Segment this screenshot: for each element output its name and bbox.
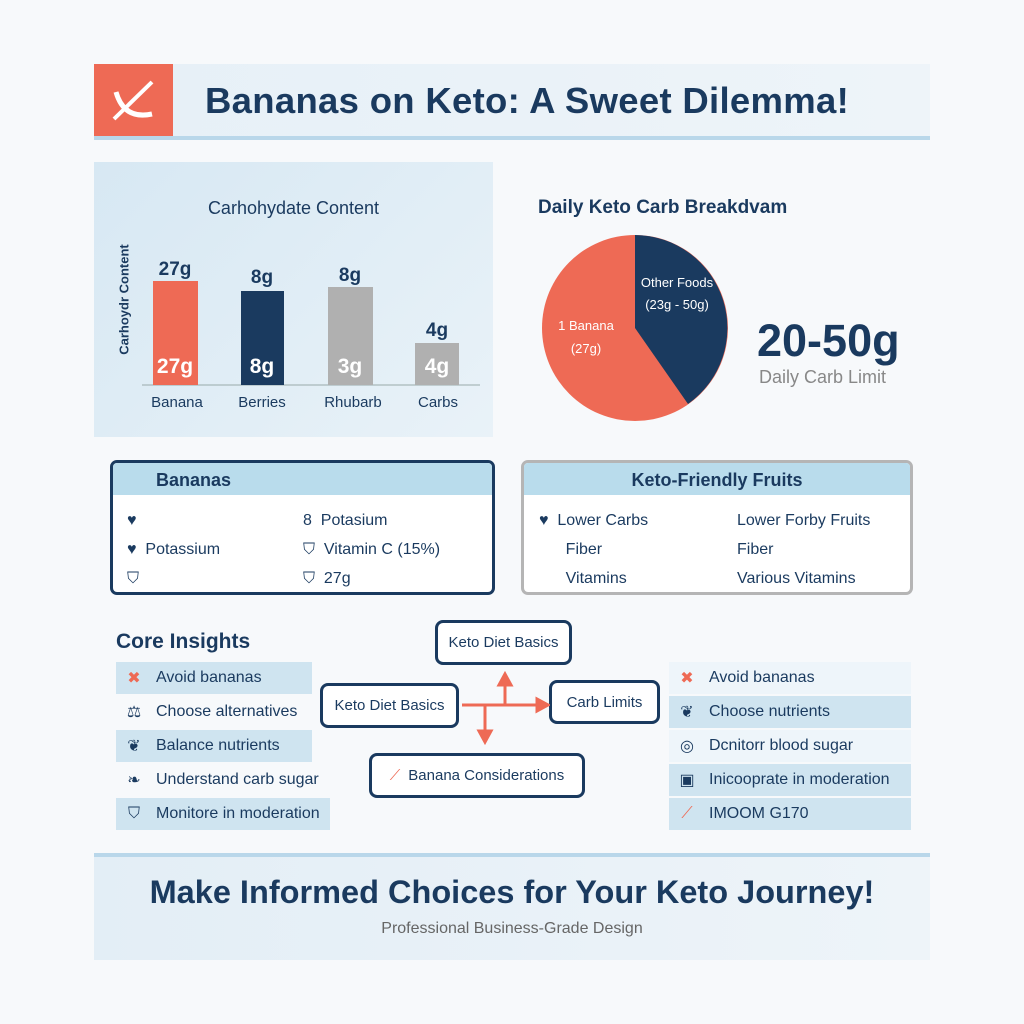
pie chart: Other Foods [641, 275, 714, 290]
right insight list: IMOOM G170 [709, 805, 809, 822]
left insight list: ❧ [127, 772, 141, 789]
right insight list: ✖ [680, 670, 694, 687]
left insight list: ✖ [127, 670, 141, 687]
bar chart: 8g [250, 355, 274, 378]
pie chart [542, 235, 728, 421]
panel: keto fruits: Various Vitamins [737, 570, 856, 587]
footer: Make Informed Choices for Your Keto Journey! [150, 874, 874, 910]
left insight list: Choose alternatives [156, 703, 297, 720]
panel: keto fruits: Lower Forby Fruits [737, 512, 870, 529]
arrows [462, 671, 550, 745]
panel: keto fruits: Fiber [566, 541, 602, 558]
icon: crossed banana [94, 64, 173, 136]
panel: keto fruits: Fiber [737, 541, 773, 558]
footer: Professional Business-Grade Design [381, 920, 643, 937]
right insight list: Choose nutrients [709, 703, 830, 720]
panel: bananas: ♥ Potassium [127, 541, 220, 558]
pie title: Daily Keto Carb Breakdvam [538, 197, 787, 218]
left insight list [116, 662, 330, 830]
y axis label: Carhoydr Content [116, 244, 132, 355]
footer [94, 853, 930, 960]
pie chart: 1 Banana [558, 318, 615, 333]
right insight list: ◎ [680, 738, 694, 755]
flow box: banana considerations: ⟋ [390, 767, 400, 784]
right insight list [669, 662, 911, 830]
flow box: banana considerations [369, 753, 585, 798]
left insight list: ⛉ [128, 805, 140, 822]
bar chart: 4g [425, 355, 449, 378]
panel: bananas: Bananas [156, 470, 231, 490]
left insight list: ❦ [127, 738, 141, 755]
header band [94, 64, 930, 140]
panel: bananas: ♥ [127, 512, 136, 529]
chart title: Carhohydate Content [208, 198, 379, 218]
bar chart: Berries [238, 394, 286, 411]
panel: bananas: ⛉ [127, 570, 139, 587]
bar chart: 27g [157, 355, 193, 378]
panel: keto fruits [521, 460, 913, 595]
left insight list: Balance nutrients [156, 737, 280, 754]
bar chart: Banana [151, 394, 204, 411]
pie chart: (23g - 50g) [645, 297, 709, 312]
panel: keto fruits: Vitamins [566, 570, 627, 587]
right insight list: Avoid bananas [709, 669, 815, 686]
right insight list: ⟋ [681, 805, 693, 822]
panel: bananas: 8 Potasium [303, 512, 387, 529]
bar chart: 3g [338, 355, 362, 378]
right insight list: Inicooprate in moderation [709, 771, 890, 788]
panel: bananas: ⛉ 27g [303, 570, 351, 587]
right insight list: ▣ [679, 772, 695, 789]
bar chart: 4g [426, 320, 448, 341]
bar chart: 8g [251, 267, 273, 288]
text: Daily Carb Limit [759, 367, 886, 387]
bar chart: 8g [339, 265, 361, 286]
panel: keto fruits: ♥ Lower Carbs [539, 512, 648, 529]
flow box: keto diet basics left [320, 683, 459, 728]
bar chart: 27g [159, 259, 191, 280]
bar chart: Carbs [418, 394, 458, 411]
flow box: keto diet basics top [435, 620, 572, 665]
right insight list: Dcnitorr blood sugar [709, 737, 853, 754]
big stat: 20-50g [757, 315, 900, 366]
left insight list: Avoid bananas [156, 669, 262, 686]
flow box: keto diet basics top: Keto Diet Basics [448, 634, 559, 651]
left insight list: ⚖ [127, 704, 141, 721]
title: Bananas on Keto: A Sweet Dilemma! [205, 80, 849, 121]
bar chart: Rhubarb [324, 394, 382, 411]
bar chart [142, 259, 480, 411]
panel: carbohydrate chart [94, 162, 493, 437]
left insight list: Monitore in moderation [156, 805, 320, 822]
left insight list: Understand carb sugar [156, 771, 319, 788]
flow box: carb limits: Carb Limits [567, 694, 642, 710]
pie chart: (27g) [571, 341, 601, 356]
flow box: carb limits [549, 680, 660, 724]
core insights title: Core Insights [116, 630, 250, 653]
flow box: banana considerations: Banana Considerations [408, 767, 564, 784]
panel: bananas: ⛉ Vitamin C (15%) [303, 541, 440, 558]
panel: bananas [110, 460, 495, 595]
right insight list: ❦ [680, 704, 694, 721]
flow box: keto diet basics left: Keto Diet Basics [334, 697, 445, 714]
panel: keto fruits: Keto-Friendly Fruits [631, 470, 802, 490]
